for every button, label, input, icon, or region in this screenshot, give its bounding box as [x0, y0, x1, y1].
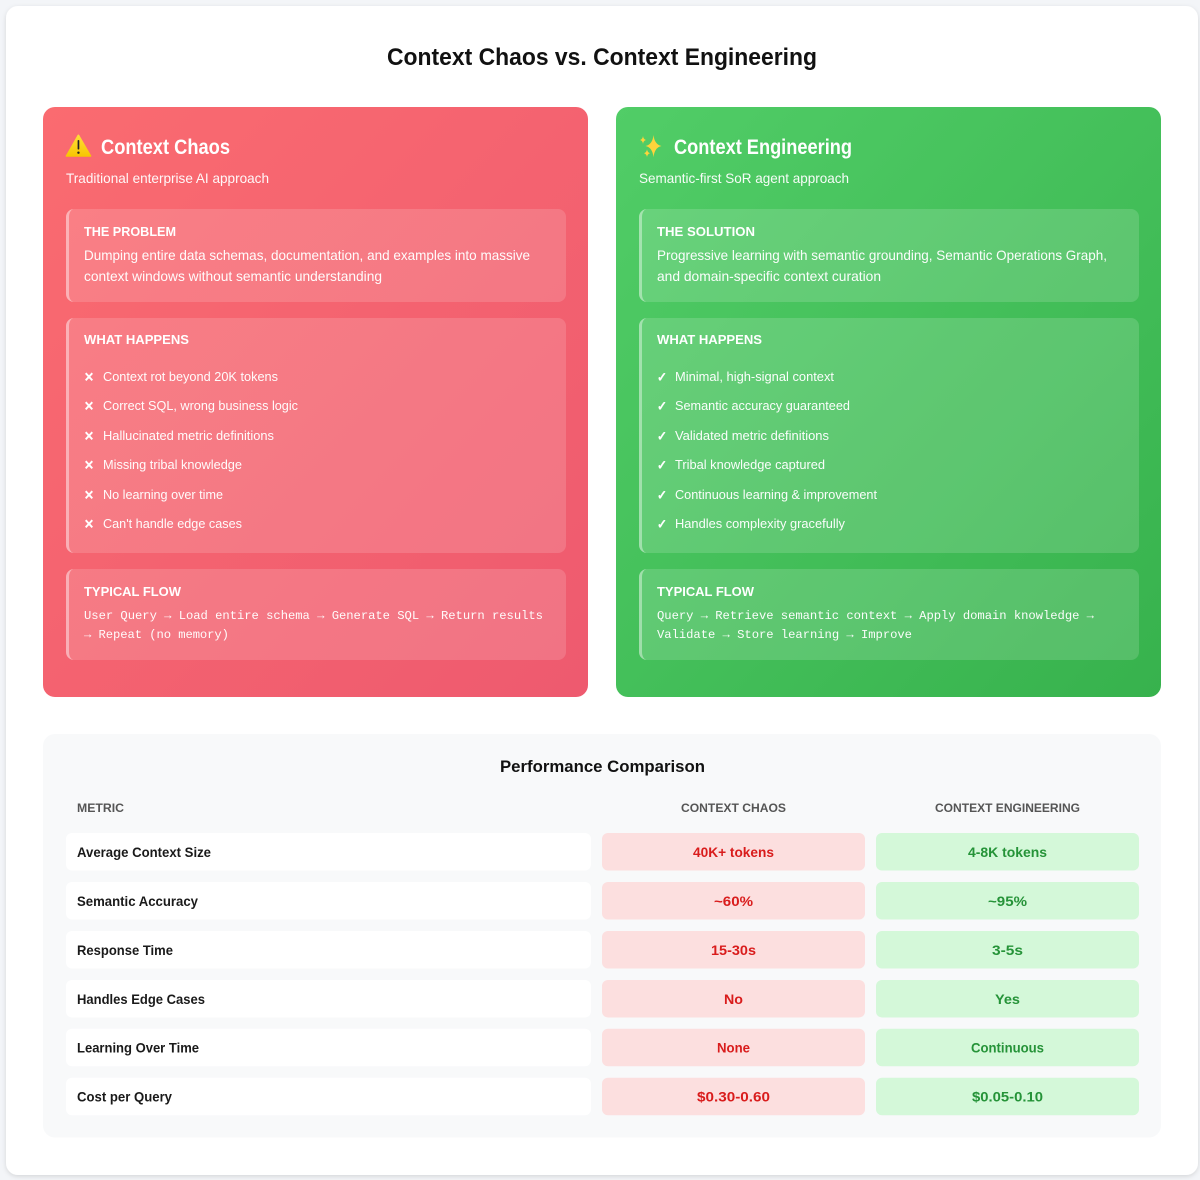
row: learning over time: Continuous [971, 1040, 1044, 1056]
row: handles edge cases: Yes [995, 992, 1020, 1007]
box: the problem [66, 209, 566, 302]
row: semantic accuracy: Semantic Accuracy [77, 894, 198, 909]
box: what happens: ✓ [657, 518, 667, 532]
box: what happens: WHAT HAPPENS [657, 333, 762, 347]
box: the problem: THE PROBLEM [84, 225, 176, 239]
row: learning over time [66, 1029, 1139, 1066]
row: average context size: Average Context Size [77, 845, 211, 860]
row: learning over time: None [717, 1040, 750, 1056]
box: what happens: Handles complexity gracefully [675, 516, 845, 531]
box: typical flow: Query → Retrieve semantic context → Apply domain knowledge → [657, 609, 1095, 623]
row: semantic accuracy [66, 882, 1139, 920]
box: the solution: Progressive learning with semantic grounding, Semantic Operations Graph, [657, 248, 1107, 263]
box: what happens: ✓ [657, 430, 667, 444]
row: cost per query: $0.30-0.60 [697, 1090, 770, 1104]
box: what happens: Missing tribal knowledge [103, 457, 242, 472]
box: typical flow: Validate → Store learning → Improve [657, 628, 912, 642]
row: response time: 15-30s [711, 943, 756, 958]
row: average context size: 4-8K tokens [968, 845, 1047, 860]
box: what happens: Context rot beyond 20K tokens [103, 369, 278, 384]
table heading: Performance Comparison [500, 757, 705, 776]
box: what happens: ✓ [657, 488, 667, 504]
table header row: CONTEXT CHAOS [681, 803, 786, 815]
box: what happens: ✓ [657, 370, 667, 386]
subtitle: Semantic-first SoR agent approach [639, 171, 849, 186]
box: typical flow: TYPICAL FLOW [84, 585, 181, 599]
box: what happens: Continuous learning & improvement [675, 487, 877, 502]
table header row: CONTEXT ENGINEERING [935, 803, 1080, 815]
box: what happens: No learning over time [103, 487, 223, 502]
row: cost per query: $0.05-0.10 [972, 1090, 1043, 1104]
row: handles edge cases: Handles Edge Cases [77, 992, 205, 1007]
box: what happens: ✕ [84, 370, 94, 386]
box: what happens: ✓ [657, 458, 667, 474]
box: the solution [639, 209, 1139, 302]
box: the solution: and domain-specific context curation [657, 269, 881, 284]
row: cost per query [66, 1078, 1139, 1115]
box: what happens [639, 318, 1139, 553]
row: semantic accuracy: ~95% [988, 894, 1027, 909]
row: handles edge cases [66, 980, 1139, 1018]
table header row: METRIC [77, 803, 124, 815]
box: typical flow: → Repeat (no memory) [84, 628, 229, 642]
box: what happens: Validated metric definitions [675, 428, 829, 443]
box: what happens: Can't handle edge cases [103, 516, 242, 531]
table header row [77, 803, 1080, 815]
box: what happens: ✕ [84, 430, 94, 444]
heading: context chaos: Context Chaos [101, 136, 230, 159]
panel: performance comparison table [43, 734, 1161, 1138]
box: what happens: Correct SQL, wrong business logic [103, 398, 298, 413]
row: learning over time: Learning Over Time [77, 1040, 199, 1056]
box: the solution: THE SOLUTION [657, 225, 755, 239]
panel: context engineering [616, 107, 1161, 697]
box: what happens: ✕ [84, 458, 94, 474]
row: handles edge cases: No [724, 992, 743, 1007]
subtitle: Traditional enterprise AI approach [66, 171, 269, 186]
box: typical flow: TYPICAL FLOW [657, 585, 754, 599]
title: Context Chaos vs. Context Engineering [387, 44, 817, 71]
box: what happens: Tribal knowledge captured [675, 457, 825, 472]
row: semantic accuracy: ~60% [714, 894, 753, 909]
box: typical flow [639, 569, 1139, 660]
box: the problem: context windows without semantic understanding [84, 269, 382, 284]
row: cost per query: Cost per Query [77, 1090, 172, 1104]
box: what happens: ✓ [657, 400, 667, 414]
row: response time [66, 931, 1139, 968]
row: response time: 3-5s [992, 943, 1023, 958]
box: what happens [66, 318, 566, 553]
box: what happens: ✕ [84, 400, 94, 414]
icon: sparkles [640, 135, 662, 157]
box: typical flow: User Query → Load entire schema → Generate SQL → Return results [84, 609, 543, 623]
panel: context chaos [43, 107, 588, 697]
row: response time: Response Time [77, 943, 173, 958]
box: the problem: Dumping entire data schemas, documentation, and examples into massive [84, 248, 530, 263]
box: typical flow [66, 569, 566, 660]
box: what happens: Hallucinated metric definitions [103, 428, 274, 443]
heading: context engineering: Context Engineering [674, 136, 852, 159]
box: what happens: Minimal, high-signal context [675, 369, 834, 384]
row: average context size [66, 833, 1139, 870]
row: average context size: 40K+ tokens [693, 845, 774, 860]
box: what happens: ✕ [84, 488, 94, 504]
icon: warning sign [66, 134, 91, 157]
box: what happens: WHAT HAPPENS [84, 333, 189, 347]
box: what happens: ✕ [84, 518, 94, 532]
box: what happens: Semantic accuracy guaranteed [675, 398, 850, 413]
